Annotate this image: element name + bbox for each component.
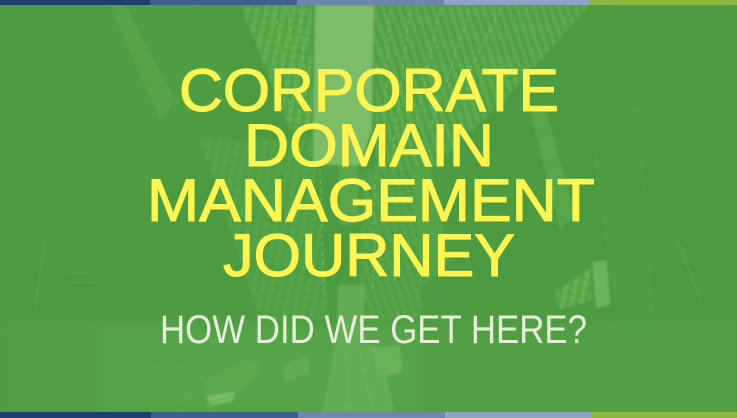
title: CORPORATE (179, 57, 559, 124)
subtitle: HOW DID WE GET HERE? (160, 308, 587, 352)
lower street glow (322, 345, 395, 412)
top colour band (0, 0, 737, 5)
shop signs (555, 268, 592, 310)
towers left and right of the sky (240, 5, 312, 130)
title: JOURNEY (223, 222, 515, 289)
sky gap between towers (313, 5, 374, 165)
window streaks (275, 10, 500, 410)
bottom colour band (0, 412, 737, 418)
parked car (205, 360, 262, 410)
title: MANAGEMENT (147, 167, 595, 234)
title: DOMAIN (244, 112, 494, 179)
title (147, 57, 595, 289)
light building facets (110, 5, 175, 120)
